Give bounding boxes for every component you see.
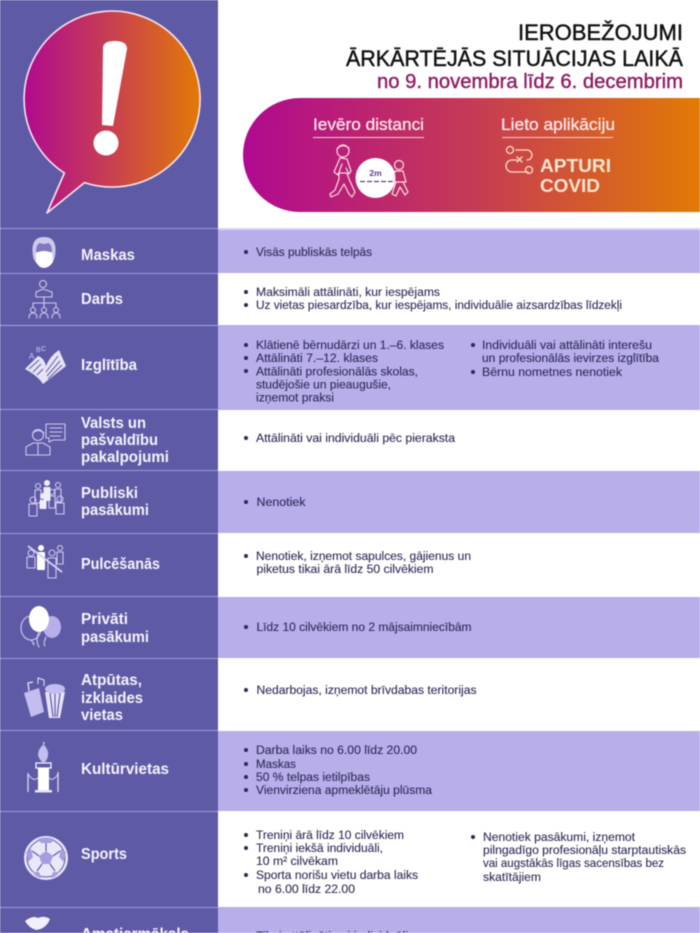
text column two: pilngadīgo profesionāļu starptautiskās bbox=[483, 843, 686, 857]
text: Uz vietas piesardzība, kur iespējams, individuālie aizsardzības līdzekļi bbox=[256, 298, 622, 312]
label: pasākumi bbox=[81, 502, 149, 519]
text column one: 10 m² cilvēkam bbox=[256, 854, 338, 868]
icon: adult walking bbox=[330, 145, 355, 197]
text column one: Attālināti 7.–12. klases bbox=[256, 351, 378, 365]
icon: two metre circle: 2m bbox=[369, 168, 382, 178]
label: Izglītība bbox=[81, 357, 137, 374]
icon: open book bbox=[25, 346, 66, 384]
row: Amatiermāksla bbox=[25, 917, 408, 933]
app name: APTURI bbox=[540, 156, 611, 176]
text bbox=[244, 285, 622, 312]
icon: child walking bbox=[392, 160, 408, 196]
label bbox=[81, 415, 169, 466]
title: IEROBEŽOJUMI bbox=[518, 20, 683, 45]
label: izklaides bbox=[81, 690, 143, 707]
icon: work hierarchy bbox=[29, 280, 60, 318]
row: Privāti pasākumi bbox=[21, 606, 472, 647]
text bbox=[244, 743, 432, 797]
row: Publiski pasākumi bbox=[29, 480, 306, 519]
text: Darba laiks no 6.00 līdz 20.00 bbox=[256, 743, 417, 757]
icon: official with speech bubble bbox=[26, 424, 65, 455]
text: Vienvirziena apmeklētāju plūsma bbox=[256, 783, 432, 797]
row: Valsts un pašvaldību pakalpojumi bbox=[26, 415, 455, 466]
label: pašvaldību bbox=[81, 432, 158, 449]
text: Maksimāli attālināti, kur iespējams bbox=[256, 285, 440, 299]
label: Maskas bbox=[81, 247, 135, 264]
app name: COVID bbox=[540, 176, 600, 196]
row: Pulcēšanās bbox=[27, 545, 471, 578]
row: Darbs bbox=[29, 280, 622, 318]
title: ĀRKĀRTĒJĀS SITUĀCIJAS LAIKĀ bbox=[346, 46, 683, 71]
label: pasākumi bbox=[81, 629, 149, 646]
heading: use the app: Lieto aplikāciju bbox=[501, 116, 615, 134]
row: Maskas bbox=[32, 237, 372, 268]
text bbox=[244, 549, 471, 576]
left sidebar background bbox=[0, 0, 218, 933]
icon: vase on pedestal bbox=[28, 742, 58, 792]
label: Privāti bbox=[81, 611, 128, 628]
row backgrounds bbox=[0, 228, 700, 933]
label: pakalpojumi bbox=[81, 449, 169, 466]
text: Līdz 10 cilvēkiem no 2 mājsaimniecībām bbox=[256, 620, 472, 634]
row: Atpūtas, izklaides vietas bbox=[24, 672, 476, 724]
text: 50 % telpas ietilpības bbox=[256, 770, 370, 784]
icon: open book: C bbox=[41, 346, 46, 353]
icon: crowd bbox=[29, 480, 64, 516]
text: Visās publiskās telpās bbox=[256, 245, 372, 259]
icon: app route logo bbox=[506, 146, 532, 174]
text column one: no 6.00 līdz 22.00 bbox=[258, 882, 355, 896]
text column two bbox=[471, 338, 659, 379]
text column two: un profesionālās ievirzes izglītība bbox=[482, 351, 659, 365]
app name bbox=[540, 156, 611, 196]
text column two: skatītājiem bbox=[483, 870, 541, 884]
text: Maskas bbox=[256, 757, 296, 771]
label: Darbs bbox=[81, 291, 123, 308]
icon: open book: A bbox=[29, 352, 35, 361]
icon: theatre lips bbox=[25, 917, 50, 930]
row: Kultūrvietas bbox=[28, 742, 432, 797]
row: Izglītība bbox=[25, 338, 659, 404]
label: Pulcēšanās bbox=[81, 556, 160, 573]
icon: open book: B bbox=[36, 347, 41, 354]
label bbox=[81, 611, 149, 646]
icon: balloons bbox=[21, 606, 61, 647]
icon: no gathering bbox=[27, 545, 63, 578]
text column one: studējošie un pieaugušie, bbox=[256, 378, 391, 392]
text column two bbox=[471, 830, 686, 884]
label bbox=[81, 672, 143, 724]
text column one: Treniņi iekšā individuāli, bbox=[256, 841, 383, 855]
icon: drink and popcorn bbox=[24, 678, 65, 718]
text column two: Bērnu nometnes nenotiek bbox=[482, 365, 623, 379]
text column one bbox=[244, 338, 444, 404]
label: Valsts un bbox=[81, 415, 146, 432]
label bbox=[81, 485, 149, 519]
icon: two metre circle bbox=[356, 158, 396, 198]
label: Publiski bbox=[81, 485, 138, 502]
speech bubble with exclamation mark icon bbox=[24, 11, 200, 213]
text: Nenotiek, izņemot sapulces, gājienus un bbox=[256, 549, 471, 563]
label: Atpūtas, bbox=[81, 672, 142, 689]
text column one: Klātienē bērnudārzi un 1.–6. klases bbox=[256, 338, 444, 352]
text: Attālināti vai individuāli pēc pieraksta bbox=[256, 431, 455, 445]
text column one bbox=[244, 828, 418, 896]
label: Sports bbox=[81, 846, 127, 863]
text: Nedarbojas, izņemot brīvdabas teritorijas bbox=[256, 683, 476, 697]
text column two: Nenotiek pasākumi, izņemot bbox=[483, 830, 636, 844]
icon: face mask bbox=[32, 237, 56, 268]
text column one: Treniņi ārā līdz 10 cilvēkiem bbox=[256, 828, 404, 842]
title bbox=[346, 20, 683, 71]
text: piketus tikai ārā līdz 50 cilvēkiem bbox=[256, 562, 434, 576]
heading: keep distance: Ievēro distanci bbox=[313, 116, 424, 134]
label: Kultūrvietas bbox=[81, 761, 169, 778]
row: Sports bbox=[24, 828, 686, 896]
text column one: Attālināti profesionālās skolas, bbox=[256, 364, 418, 378]
text column two: Individuāli vai attālināti interešu bbox=[482, 338, 652, 352]
icon: football bbox=[24, 836, 68, 880]
panel: distance and app banner bbox=[243, 98, 700, 212]
label: vietas bbox=[81, 707, 123, 724]
text: Nenotiek bbox=[256, 495, 306, 509]
text column one: Sporta norišu vietu darba laiks bbox=[256, 868, 418, 882]
text column two: vai augstākās līgas sacensības bez bbox=[483, 856, 664, 870]
subtitle: dates: no 9. novembra līdz 6. decembrim bbox=[377, 71, 683, 93]
text column one: izņemot praksi bbox=[256, 390, 334, 404]
